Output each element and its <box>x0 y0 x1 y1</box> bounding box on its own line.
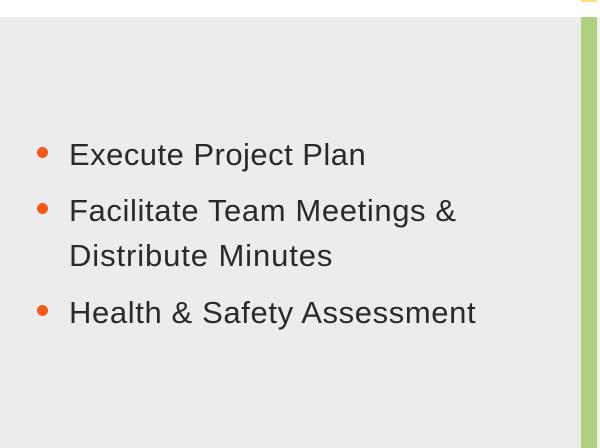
accent: yellow bar <box>581 0 597 2</box>
bullet: Facilitate Team Meetings: Facilitate Team Meetings & <box>69 192 457 228</box>
bullet: Facilitate Team Meetings: Distribute Minutes <box>69 238 333 272</box>
accent: green vertical bar <box>581 17 597 448</box>
bullet: Facilitate Team Meetings <box>37 192 457 272</box>
bullet: Health and Safety Assessment: Health & Safety Assessment <box>69 294 476 330</box>
bullet list <box>37 136 476 330</box>
right edge strip <box>597 17 600 448</box>
bullet: Execute Project Plan: Execute Project Plan <box>69 136 366 172</box>
top white strip <box>0 0 600 17</box>
